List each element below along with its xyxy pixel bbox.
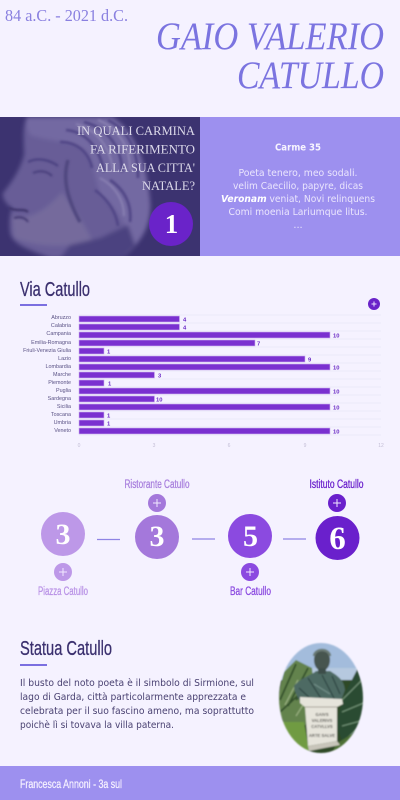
poem heading: Carme 35 bbox=[275, 142, 321, 154]
axis labels: 3 bbox=[153, 443, 156, 449]
number badge bbox=[149, 202, 193, 246]
value labels: 10 bbox=[333, 366, 339, 372]
category labels: Abruzzo bbox=[51, 315, 71, 321]
stat: Piazza Catullo bbox=[38, 512, 88, 598]
axis labels bbox=[78, 443, 384, 449]
category labels: Lazio bbox=[58, 356, 71, 362]
value labels: 1 bbox=[107, 422, 111, 428]
heading: Statua Catullo: Statua Catullo bbox=[20, 638, 112, 660]
panel: Carme 35 bbox=[200, 117, 400, 256]
value labels: 10 bbox=[333, 334, 339, 340]
question text: NATALE? bbox=[142, 178, 195, 193]
title bbox=[156, 15, 384, 97]
value labels: 1 bbox=[108, 382, 112, 388]
value labels: 10 bbox=[333, 430, 339, 436]
image: statue of Catullus: VALERIVS bbox=[312, 718, 333, 723]
category labels: Friuli-Venezia Giulia bbox=[23, 348, 71, 354]
category labels bbox=[23, 315, 71, 434]
image: portrait of Catullus bbox=[3, 117, 150, 258]
axis labels: 6 bbox=[228, 443, 231, 449]
stat: Bar Catullo bbox=[228, 514, 272, 598]
value labels: 4 bbox=[183, 326, 187, 332]
value labels: 10 bbox=[333, 406, 339, 412]
stat: Istituto Catullo: Istituto Catullo bbox=[310, 479, 364, 491]
bars bbox=[79, 316, 330, 434]
category labels: Sardegna bbox=[48, 396, 71, 402]
axis labels: 0 bbox=[78, 443, 81, 449]
category labels: Lombardia bbox=[46, 364, 71, 370]
statue description: celebrata per il suo fascino ameno, ma soprattutto bbox=[20, 706, 254, 717]
poem text: Veronam veniat, Novi relinquens bbox=[221, 194, 375, 205]
footer bbox=[0, 766, 400, 800]
heading: Statua Catullo bbox=[20, 638, 112, 666]
category labels: Puglia bbox=[56, 388, 71, 394]
axis labels: 9 bbox=[304, 443, 307, 449]
category labels: Emilia-Romagna bbox=[31, 340, 71, 346]
category labels: Toscana bbox=[51, 412, 71, 418]
statue description bbox=[20, 677, 254, 731]
value labels: 1 bbox=[107, 350, 111, 356]
image: statue of Catullus: CATVLLVS bbox=[311, 724, 333, 729]
value labels: 3 bbox=[158, 374, 162, 380]
date range: 84 a.C. - 2021 d.C. bbox=[5, 6, 128, 25]
footer: Francesca Annoni - 3a sul bbox=[20, 777, 122, 791]
statue description: Il busto del noto poeta è il simbolo di Sirmione, sul bbox=[20, 677, 254, 689]
number badge: 1 bbox=[165, 209, 178, 239]
stat: Bar Catullo: Bar Catullo bbox=[230, 586, 271, 598]
bar chart bbox=[23, 315, 384, 449]
image: statue of Catullus: ARTE SALVE bbox=[309, 733, 335, 738]
category labels: Marche bbox=[53, 372, 71, 378]
stat: Istituto Catullo: 6 bbox=[329, 521, 346, 557]
question text: IN QUALI CARMINA bbox=[77, 123, 196, 138]
value labels: 10 bbox=[333, 390, 339, 396]
heading: Via Catullo bbox=[20, 279, 90, 306]
poem text: ... bbox=[293, 220, 303, 231]
question text: ALLA SUA CITTA' bbox=[96, 160, 195, 175]
value labels: 1 bbox=[107, 414, 111, 420]
category labels: Campania bbox=[46, 331, 71, 337]
image: statue of Catullus bbox=[278, 642, 364, 754]
value labels: 10 bbox=[156, 398, 162, 404]
stat: Ristorante Catullo: 3 bbox=[150, 520, 164, 553]
statue description: poichè lì si tovava la villa paterna. bbox=[20, 719, 174, 731]
value labels: 9 bbox=[308, 358, 312, 364]
question text: FA RIFERIMENTO bbox=[90, 142, 195, 156]
stat: Ristorante Catullo: Ristorante Catullo bbox=[124, 479, 190, 491]
heading: Via Catullo: Via Catullo bbox=[20, 279, 90, 301]
stat: Bar Catullo: 5 bbox=[243, 520, 258, 553]
category labels: Piemonte bbox=[48, 380, 71, 386]
statue description: lago di Garda, città particolarmente apprezzata e bbox=[20, 691, 246, 703]
icon: plus button bbox=[368, 298, 380, 310]
value labels: 4 bbox=[183, 318, 187, 324]
panel: question with portrait bbox=[0, 117, 200, 258]
poem text bbox=[221, 168, 375, 231]
stat: Ristorante Catullo bbox=[124, 479, 190, 559]
poem text: Poeta tenero, meo sodali. bbox=[238, 168, 358, 179]
question text bbox=[77, 123, 196, 193]
axis labels: 12 bbox=[378, 443, 384, 449]
poem text: velim Caecilio, papyre, dicas bbox=[233, 181, 363, 192]
stat: Istituto Catullo bbox=[310, 479, 364, 560]
category labels: Calabria bbox=[51, 323, 71, 329]
value labels bbox=[107, 318, 339, 436]
category labels: Sicilia bbox=[57, 404, 71, 410]
value labels: 7 bbox=[257, 342, 260, 348]
category labels: Umbria bbox=[54, 420, 71, 426]
category labels: Veneto bbox=[54, 428, 71, 434]
stat: Piazza Catullo: 3 bbox=[56, 518, 70, 551]
poem text: Comi moenia Lariumque litus. bbox=[228, 207, 368, 218]
image: statue of Catullus: GAIVS bbox=[315, 712, 329, 717]
stat: Piazza Catullo: Piazza Catullo bbox=[38, 586, 88, 598]
